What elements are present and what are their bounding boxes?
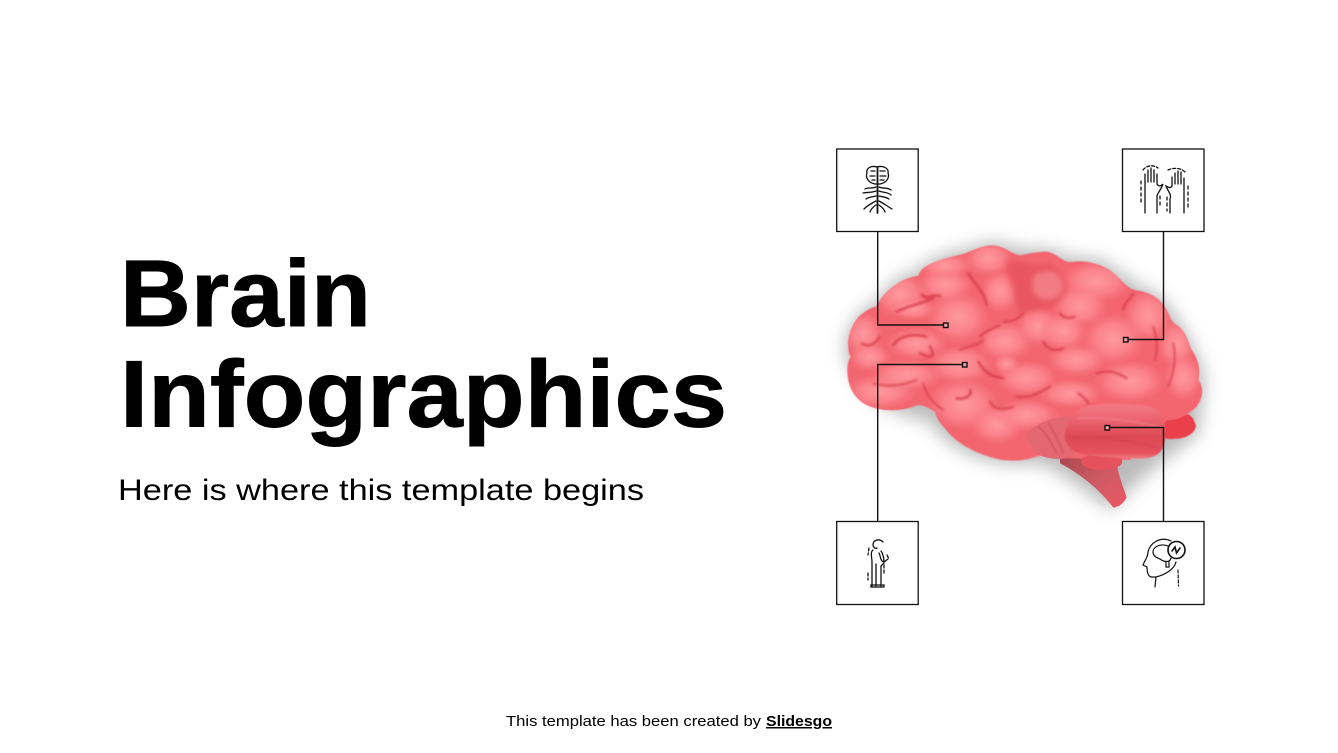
subtitle: Here is where this template begins (118, 474, 644, 507)
connector lines (878, 232, 1164, 521)
footer credit: This template has been created by (506, 713, 762, 730)
icon box: person (837, 522, 918, 604)
icon box: hands (1122, 149, 1204, 232)
icon: standing person with tremor (868, 540, 889, 587)
icon: raised trembling hands (1141, 166, 1188, 213)
icon box: nervous system (837, 149, 918, 232)
cerebellum (1065, 404, 1166, 470)
cortex base (847, 245, 1202, 460)
sulci creases (862, 273, 1175, 410)
title (120, 241, 727, 448)
slide (120, 148, 1214, 729)
central dark shade (1007, 260, 1066, 313)
title: Infographics (120, 342, 727, 448)
brain illustration (843, 242, 1204, 510)
icon box: head (1122, 522, 1204, 604)
title: Brain (120, 241, 371, 347)
gyri highlights (843, 242, 1203, 447)
icon: brain and spinal nerves (863, 166, 892, 213)
gyri and sulci, clipped to outline (843, 242, 1203, 447)
rear dark lobe (1160, 414, 1196, 439)
icon: head profile with brain and bolt (1143, 539, 1185, 587)
brain stem (1060, 453, 1127, 508)
footer credit: Slidesgo (766, 713, 832, 730)
cerebellum side (1027, 416, 1077, 459)
lower temporal lobe (945, 427, 1043, 461)
brain shadow (845, 242, 1204, 510)
